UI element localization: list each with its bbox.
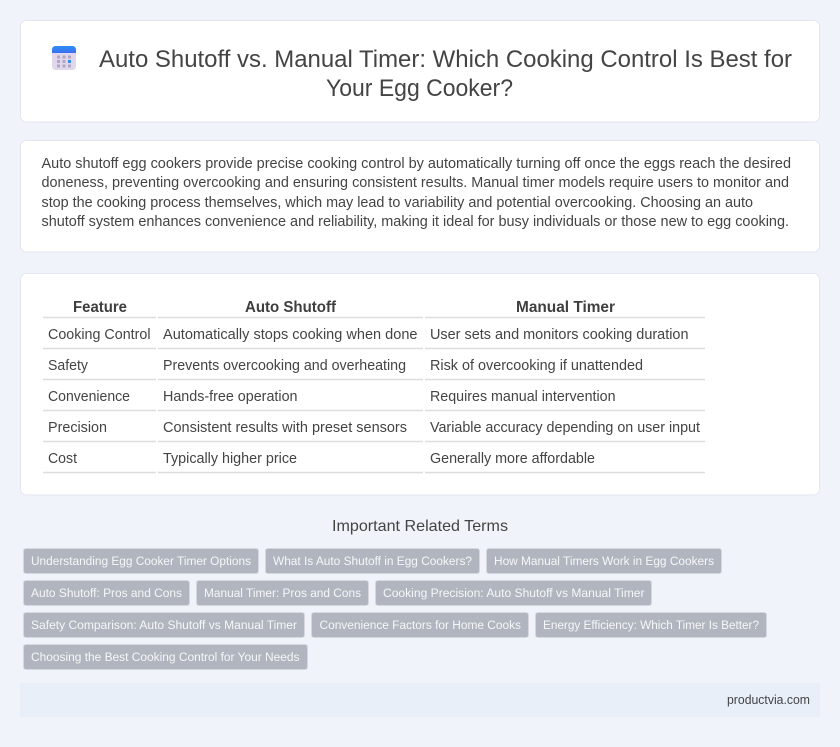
tag: Safety Comparison: Auto Shutoff vs Manual Timer [31,618,297,632]
tag [266,548,480,574]
row: cooking control: Cooking Control [48,327,150,343]
paragraph text: Auto shutoff egg cookers provide precise cooking control by automatically turning off once the eggs reach the desired [42,156,791,172]
heading: important related terms: Important Related Terms [332,518,508,535]
tag: Convenience Factors for Home Cooks [320,618,521,632]
title text: Auto Shutoff vs. Manual Timer: Which Cooking Control Is Best for [99,46,792,73]
row: cooking control: User sets and monitors cooking duration [430,327,688,343]
paragraph text: doneness, preventing overcooking and ensuring consistent results. Manual timer models require users to monitor and [42,175,789,191]
tag [486,548,722,574]
row: convenience: Hands-free operation [163,389,298,405]
tag: Understanding Egg Cooker Timer Options [31,554,251,568]
row: cost: Typically higher price [163,451,297,467]
tag: Choosing the Best Cooking Control for Your Needs [31,650,300,664]
table header [73,299,615,316]
tag: Manual Timer: Pros and Cons [204,586,361,600]
footer [20,683,820,717]
tag [24,644,308,670]
tag [376,580,652,606]
table header: Auto Shutoff [245,299,337,316]
paragraph text: stop the cooking process themselves, which may lead to variability and potential overcooking. Choosing an auto [42,195,753,211]
table header: Feature [73,299,127,316]
row: convenience: Convenience [48,389,130,405]
paragraph text [42,156,791,230]
tag [24,548,258,574]
tag: Energy Efficiency: Which Timer Is Better? [543,618,759,632]
row: precision: Variable accuracy depending on user input [430,420,700,436]
row: safety: Prevents overcooking and overheating [163,358,406,374]
row: precision: Consistent results with preset sensors [163,420,407,436]
tag: Cooking Precision: Auto Shutoff vs Manual Timer [383,586,644,600]
row: cost: Generally more affordable [430,451,595,467]
row: cooking control: Automatically stops cooking when done [163,327,418,343]
tag [312,612,528,638]
tag [24,612,304,638]
tag: What Is Auto Shutoff in Egg Cookers? [273,554,472,568]
tag [536,612,766,638]
table header: Manual Timer [516,299,615,316]
row: cost [48,451,595,467]
title text: Your Egg Cooker? [326,75,513,102]
row: cooking control [48,327,688,343]
tag: How Manual Timers Work in Egg Cookers [494,554,714,568]
row: convenience: Requires manual intervention [430,389,616,405]
row: precision [48,420,700,436]
row: convenience [48,389,616,405]
panel: comparison table [20,274,820,495]
row: cost: Cost [48,451,77,467]
panel: summary paragraph [20,140,820,252]
row: safety: Safety [48,358,89,374]
icon: calendar [52,46,76,70]
tag: Auto Shutoff: Pros and Cons [31,586,182,600]
title text [99,46,792,102]
related term tags [24,548,766,670]
paragraph text: shutoff system enhances convenience and reliability, making it ideal for busy individuals or those new to egg cooking. [42,214,789,230]
row: safety: Risk of overcooking if unattended [430,358,643,374]
row: safety [48,358,643,374]
tag [196,580,368,606]
row: precision: Precision [48,420,107,436]
footer site name: productvia.com [727,693,810,707]
panel: title [20,20,820,122]
tag [24,580,190,606]
